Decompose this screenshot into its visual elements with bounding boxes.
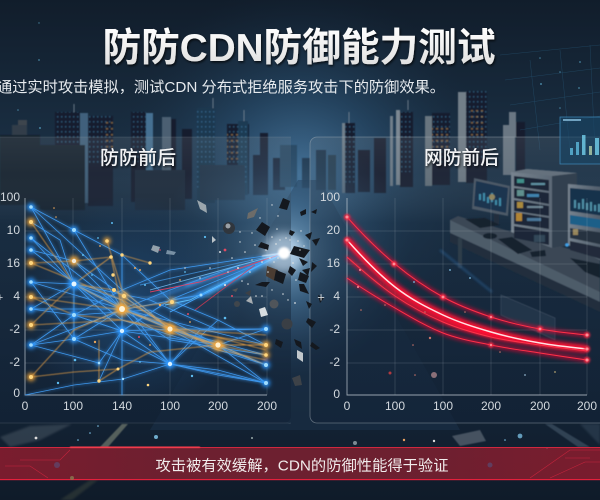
x axis labels bbox=[344, 399, 597, 413]
server two bbox=[565, 184, 600, 262]
keyboards bbox=[465, 218, 600, 278]
y axis labels: 16 bbox=[7, 256, 20, 270]
background: skyline bbox=[0, 91, 525, 210]
chart hub glow bbox=[25, 198, 267, 395]
chart: mitigated traffic curves bbox=[317, 190, 597, 413]
background: network grid top right bbox=[500, 45, 600, 150]
plus mark: + bbox=[317, 289, 325, 304]
x axis labels: 200 bbox=[208, 399, 228, 413]
y axis labels: -2 bbox=[9, 322, 20, 336]
red curve glow bbox=[347, 217, 587, 360]
y axis labels bbox=[0, 190, 20, 400]
x axis labels: 100 bbox=[160, 399, 180, 413]
subtitle: 通过实时攻击模拟，测试CDN 分布式拒绝服务攻击下的防御效果。 bbox=[0, 79, 445, 96]
y axis labels: -2 bbox=[329, 322, 340, 336]
server desk scene bbox=[440, 169, 600, 340]
desk bbox=[450, 216, 600, 340]
x axis labels: 200 bbox=[481, 399, 501, 413]
debris chunks bbox=[151, 198, 324, 386]
banner circuit decoration bbox=[5, 450, 600, 478]
x axis labels: 0 bbox=[344, 399, 351, 413]
title: 防防CDN防御能力测试 bbox=[102, 27, 496, 70]
y axis labels: 4 bbox=[13, 289, 20, 303]
ambient particles bbox=[360, 269, 556, 378]
chart scatter particles bbox=[53, 207, 233, 384]
background: road in perspective bbox=[150, 180, 460, 430]
banner dots bbox=[54, 462, 492, 480]
chart axes bbox=[347, 198, 587, 395]
panel: after mitigation chart bbox=[310, 137, 600, 423]
y axis labels: 10 bbox=[7, 223, 20, 237]
orange traffic lines bbox=[31, 222, 266, 381]
chart: chaotic attack traffic bbox=[0, 190, 284, 413]
panel heading: right: 网防前后 bbox=[424, 147, 499, 169]
x axis labels bbox=[22, 399, 277, 413]
server one bbox=[511, 169, 577, 248]
y axis labels: -2 bbox=[329, 355, 340, 369]
chart grid bbox=[347, 198, 587, 395]
x axis labels: 100 bbox=[63, 399, 83, 413]
x axis labels: 200 bbox=[257, 399, 277, 413]
dashboard screen top right bbox=[560, 117, 600, 164]
y axis labels: 0 bbox=[13, 386, 20, 400]
traffic nodes core bbox=[29, 205, 268, 386]
y axis labels: 4 bbox=[333, 289, 340, 303]
y axis labels: 100 bbox=[0, 190, 20, 204]
y axis labels: 20 bbox=[327, 223, 340, 237]
explosion core bbox=[262, 233, 306, 273]
banner text: 攻击被有效缓解，CDN的防御性能得于验证 bbox=[156, 458, 448, 474]
explosion glow streaks bbox=[150, 253, 284, 308]
x axis labels: 0 bbox=[22, 399, 29, 413]
x axis labels: 100 bbox=[385, 399, 405, 413]
panel heading: left: 防防前后 bbox=[100, 147, 176, 169]
red curves bbox=[347, 217, 587, 360]
chart grid bbox=[25, 198, 267, 395]
debris sparks bbox=[184, 204, 305, 304]
red and blue attack beams bbox=[140, 253, 284, 312]
panel: before attack chart bbox=[0, 137, 291, 423]
x axis labels: 200 bbox=[530, 399, 550, 413]
blue traffic lines bbox=[25, 207, 284, 395]
conclusion banner bbox=[0, 446, 600, 480]
x axis labels: 200 bbox=[577, 399, 597, 413]
y axis labels bbox=[320, 190, 340, 401]
red points bbox=[344, 214, 590, 363]
x axis labels: 140 bbox=[112, 399, 132, 413]
explosion with debris bbox=[151, 198, 324, 386]
y axis labels: 100 bbox=[320, 190, 340, 204]
x axis labels: 100 bbox=[433, 399, 453, 413]
background: star dots top bbox=[17, 22, 581, 129]
y axis labels: 16 bbox=[327, 256, 340, 270]
monitor bbox=[472, 178, 510, 224]
y axis labels: -2 bbox=[9, 355, 20, 369]
y axis labels: 0 bbox=[333, 387, 340, 401]
background: bottom streaks bbox=[0, 424, 600, 500]
chart axes bbox=[25, 198, 267, 395]
traffic nodes glow bbox=[27, 203, 270, 387]
floor glow streak bbox=[440, 250, 492, 292]
